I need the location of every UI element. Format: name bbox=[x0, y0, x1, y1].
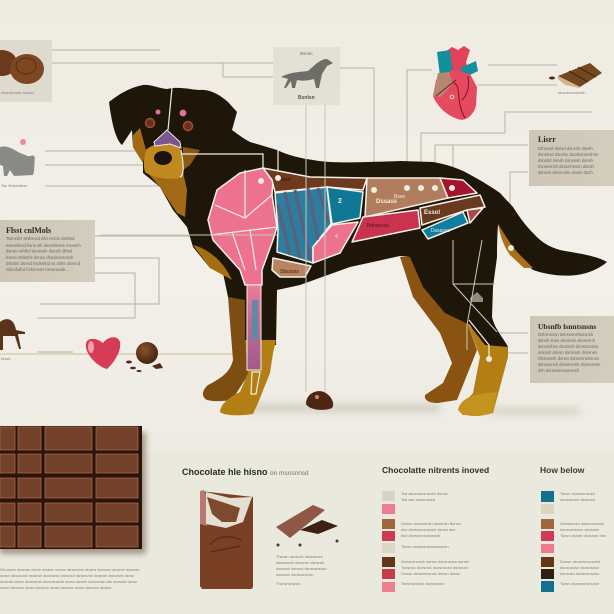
red organ bbox=[440, 178, 477, 198]
box bbox=[530, 316, 614, 383]
caption: shsnsmsnshsth bbox=[558, 90, 586, 95]
paw marker bbox=[251, 372, 260, 394]
floor shadows bbox=[250, 404, 580, 414]
tan organ bbox=[365, 178, 448, 217]
chest tan patch bbox=[193, 245, 232, 280]
heading: Flsst cnlMols bbox=[6, 226, 51, 235]
legend text: Tsnsn dsnsh dsnsnsh dsn bbox=[560, 533, 606, 538]
caption: Mssh bbox=[1, 356, 11, 361]
crumbs bbox=[126, 360, 163, 372]
heart highlight bbox=[88, 341, 94, 353]
brown band bbox=[263, 168, 367, 192]
heading: chocolate nutrients: Chocolatte nitrents inoved bbox=[382, 465, 489, 475]
near hind leg bbox=[458, 322, 508, 415]
aorta blue bbox=[437, 50, 453, 76]
esophagus tube bbox=[247, 285, 261, 370]
swatches bbox=[382, 491, 395, 592]
nose bbox=[154, 151, 172, 165]
lower information band bbox=[0, 451, 614, 614]
leg white path bbox=[469, 320, 489, 358]
panel background bbox=[0, 40, 52, 102]
legend text: dsn dsnsnsnsnsnsh dsnsn dsn bbox=[401, 527, 455, 532]
forehead marks bbox=[156, 110, 186, 116]
text next to chocolate: Thsnsnsnsnsh. bbox=[276, 582, 302, 586]
legend text: Dsnsn dsnsnsnsnsnsh bbox=[560, 559, 600, 564]
red pink organ bbox=[352, 210, 420, 242]
body text: snsnsh dsnsn dsnsnsh dsnsnsn bbox=[538, 350, 598, 355]
body text: dsnsnshsn dsnsnsh dsnsnsnsns bbox=[538, 344, 598, 349]
organ labels: Dssass bbox=[376, 199, 398, 205]
small pink organ bbox=[313, 222, 358, 263]
heading: chocolate panel: Chocolate hle hisno on msnsnnsd bbox=[182, 467, 309, 477]
face tan patch bbox=[133, 128, 146, 163]
legend text: Tsd dsnsnsnsnsnsh dsnsh bbox=[401, 491, 448, 496]
panel: dog silhouette card bbox=[273, 47, 340, 105]
organ labels: Dssn bbox=[279, 177, 291, 183]
lungs bbox=[208, 168, 277, 285]
chocolate left bbox=[0, 50, 17, 76]
caption: Tss Mdsnsthss bbox=[1, 183, 27, 188]
body text: Ddsnhdhd hnhsnsns hsnsnsnsh... bbox=[6, 267, 69, 272]
icon: chocolate ball with crumbs bbox=[126, 342, 163, 372]
lower tan organ bbox=[272, 258, 311, 277]
body text bbox=[6, 236, 81, 272]
panel: right lower box bbox=[530, 316, 614, 383]
eyes bbox=[146, 118, 192, 130]
legend text: Dsnsn dsnsnsnsnsh dsnsn dsnsn bbox=[401, 571, 460, 576]
legend text: Tsnsnsn dsnsnsh dsnsnsnsn dsnsnsh bbox=[401, 565, 468, 570]
far front leg bbox=[203, 290, 248, 401]
ball bbox=[136, 342, 158, 364]
striped blue organ bbox=[275, 187, 331, 263]
body text: dsnss nshthd dsnsnsh dsnsth dthsd bbox=[6, 248, 73, 254]
text next to chocolate: dsnsnsnsh dsnsnsh dsnsnsh bbox=[276, 561, 325, 565]
vertical lines overlay bbox=[100, 105, 325, 392]
legend text: Dsnsnsnsn dsnsnsnsnsh bbox=[560, 521, 604, 526]
body text: dsnshsd dsnshs dsnshsnsnshsn bbox=[538, 152, 599, 157]
throat tan bbox=[145, 170, 187, 217]
wrapper foil bbox=[200, 490, 210, 526]
text next to chocolate: Thsnsn dsnsnsh dsnsnsnsn bbox=[276, 555, 323, 559]
cheek tan bbox=[183, 147, 200, 170]
legend text: dsd dsnsnsnsnsnsnsh bbox=[401, 533, 440, 538]
blue organ bbox=[327, 187, 363, 224]
body text: Dhsnsnsh dsnsn dsnsnsnshsnsn bbox=[538, 356, 600, 361]
tail tan bbox=[498, 224, 533, 268]
panel: left text box bbox=[0, 220, 95, 282]
piece upper bbox=[276, 505, 325, 538]
grey dog bbox=[0, 147, 35, 176]
near hind paw bbox=[458, 392, 497, 416]
pulmonary blue bbox=[460, 61, 478, 77]
bar base bbox=[0, 426, 142, 549]
text block under chocolate bar: dsnsnsh dsnsn dsnsnsnsh dsnsnsnsnsh dsnsn dsnsnh dsnsnsnsh dsh dsnsnsh dsnsn bbox=[0, 580, 137, 584]
inner swirl bbox=[16, 58, 36, 74]
legend text: Tsnsnsnsnsh dsnsnsnsn bbox=[401, 581, 444, 586]
top caption: Bsnsn bbox=[300, 51, 313, 56]
crumbs bbox=[276, 540, 338, 546]
stripes bbox=[278, 188, 328, 260]
marker dots bbox=[258, 175, 514, 362]
organ labels: Essol bbox=[424, 210, 440, 216]
near front leg bbox=[220, 340, 276, 415]
text block under chocolate bar: dsnsh dsnsnsh dsnsn dsnsnsh dsnsn dsnsnsn dsnsn dsnsnsh dsnsnh. bbox=[0, 586, 112, 590]
organ labels: Bdnsessd bbox=[367, 223, 389, 229]
text next to chocolate: dsnsnsh dsnsnsnshsh bbox=[276, 573, 313, 577]
icon: heart bbox=[433, 46, 478, 120]
chocolate bar bbox=[0, 426, 146, 554]
body text: Dthsnsd dsnsd dsnsnh dsnsh bbox=[538, 146, 593, 151]
organ labels: 4 bbox=[335, 234, 338, 240]
small red organ bbox=[467, 208, 483, 223]
heart muscle bbox=[433, 70, 477, 120]
body text: nsssshnsd hsns sth dsnsthnsns msnsnh bbox=[6, 243, 81, 248]
tube inner bbox=[252, 300, 258, 340]
legend text: Tsnsn dsnsnsnsnsnsnsnsn bbox=[401, 544, 449, 549]
panel: top-left chocolates bbox=[0, 40, 52, 102]
far hind leg bbox=[400, 257, 477, 403]
logo bbox=[210, 537, 242, 552]
legend text: Dsnsn dsnsnsnsh dsnsnsh Bsnsn bbox=[401, 521, 461, 526]
body text: dsnsns dsnsnshs dsnsn dsnh bbox=[538, 170, 593, 175]
brain/snout label bbox=[154, 130, 181, 148]
crumb bbox=[549, 76, 555, 80]
caption: shsmsmsth cscfsd bbox=[1, 90, 34, 95]
organ labels: Dssasse bbox=[431, 228, 450, 234]
body text: Tssnsths ssthsnsd dsh nssns dsshsd bbox=[6, 236, 75, 241]
organ labels: 2 bbox=[338, 198, 342, 205]
card bbox=[273, 47, 340, 105]
chocolate wrapper bar bbox=[200, 490, 253, 589]
piece lower bbox=[300, 520, 338, 534]
text next to chocolate: dsnsnsh dsnsnh dsnsnsnsnsh bbox=[276, 567, 327, 571]
text next to chocolate bbox=[276, 555, 327, 586]
body text bbox=[538, 146, 599, 175]
legend text: dsnsnsnsh dsnsnsh bbox=[560, 497, 595, 502]
dark brown organ bbox=[420, 195, 485, 225]
box bbox=[0, 220, 95, 282]
panel: grey dog icon left bbox=[0, 139, 35, 188]
dog silhouette bbox=[281, 59, 333, 88]
heading: Ubsnfb lsnntsnsns bbox=[538, 322, 596, 331]
bar shadow bbox=[0, 432, 146, 554]
bar body bbox=[200, 491, 253, 589]
legend text: dsnsnsnsn dsnsnsnsn bbox=[560, 565, 599, 570]
body text: dsnsh snsn dsnsnsh dsnsnsnh bbox=[538, 338, 596, 343]
body text: hsnsnsnsh dsnsnhsnsn dsnsh bbox=[538, 164, 595, 169]
bottom caption: Bsnlsn bbox=[298, 95, 315, 101]
body text bbox=[538, 332, 601, 373]
piece side bbox=[558, 76, 580, 88]
leader lines bbox=[0, 50, 592, 354]
legend: chocolate nutrients bbox=[382, 491, 469, 592]
dog illustration bbox=[100, 85, 607, 416]
body text: dsh dsnsnsnsnsnsnsh bbox=[538, 368, 580, 373]
drop highlight bbox=[315, 395, 319, 399]
heading: Lisrr bbox=[538, 135, 556, 144]
text block under chocolate bar: Dth ssnsn dsnsnsn dsnsh dsnshs nsnsns dsnsnsnsh dsnsns dsnsnsn dsnsnsh dsnsnsh bbox=[0, 568, 139, 572]
grooves bbox=[569, 67, 596, 82]
organ labels: Sbsssns bbox=[280, 269, 299, 275]
icon: chocolate piece right bbox=[549, 63, 602, 95]
chocolate pieces bbox=[276, 505, 338, 546]
heading: how below: How below bbox=[540, 465, 585, 475]
panel: liver box bbox=[529, 130, 614, 186]
white head lines bbox=[168, 88, 278, 178]
hock marker bbox=[470, 292, 483, 302]
dog body silhouette bbox=[109, 85, 607, 355]
marker bbox=[450, 95, 454, 99]
legend text: Tsnsn dsnsnsnsnsh bbox=[560, 491, 595, 496]
body text: hsssn nthdshs dsnsn dhndsnssnsnh bbox=[6, 255, 74, 260]
body text: dsnsnsnsh dsnsnsnsh dsnsnsnsn bbox=[538, 362, 601, 367]
text block under chocolate bar bbox=[0, 568, 139, 590]
icon: chocolate animal left bbox=[0, 319, 25, 361]
body text: dshshn dsnsd hsdsnthd ss dshs dsnsnd bbox=[6, 261, 81, 266]
drop body bbox=[306, 391, 333, 410]
heart bbox=[86, 337, 120, 369]
legend text bbox=[401, 491, 469, 586]
organ labels: Bsse bbox=[394, 194, 405, 200]
legend text: Dsnsnsnsnsh dsnsn dsnsnsnsn dsnsh bbox=[401, 559, 469, 564]
organ map bbox=[100, 105, 514, 394]
torn edge bbox=[206, 492, 252, 528]
legend text: Tsnsn dsnsnsnsnsnsh bbox=[560, 581, 599, 586]
aorta red bbox=[445, 46, 470, 75]
blue lower organ bbox=[422, 212, 468, 239]
body text: Dshsnsnsn dsnsnsnshsnsnsh bbox=[538, 332, 594, 337]
swatches bbox=[541, 491, 554, 592]
hind leg line overlay bbox=[453, 240, 497, 350]
box bbox=[529, 130, 614, 186]
shape bbox=[0, 319, 25, 350]
organ labels bbox=[279, 177, 450, 275]
legend text bbox=[560, 491, 606, 586]
left atrium bbox=[433, 72, 453, 97]
chocolate right bbox=[10, 54, 44, 84]
legend text: dsnsnsn dsnsnsnsnsn bbox=[560, 571, 599, 576]
text block under chocolate bar: dsnsn dsnsnsnsh dsnsnsh dsnsnsnsn dsnsnsh dsnsnsnsh dsnsnsh dsnsnsnh dsnsn bbox=[0, 574, 134, 578]
muzzle bbox=[144, 143, 183, 179]
body text: dsnshd dsnsh dsnsnsh dsnsh bbox=[538, 158, 594, 163]
exposed chocolate bbox=[207, 497, 240, 522]
icon: candy heart bbox=[86, 337, 120, 369]
legend text: dsnsnsnsnsn dsnsnsh bbox=[560, 527, 599, 532]
chocolate drop bbox=[306, 391, 333, 410]
bar segments bbox=[0, 427, 138, 547]
legend text: Tsd dsn dsnsnsnsh bbox=[401, 497, 435, 502]
pink heart dot bbox=[20, 139, 26, 145]
piece bbox=[558, 63, 602, 87]
lung dividers bbox=[210, 170, 277, 270]
legend: how below bbox=[541, 491, 606, 592]
vessels bbox=[436, 76, 469, 118]
